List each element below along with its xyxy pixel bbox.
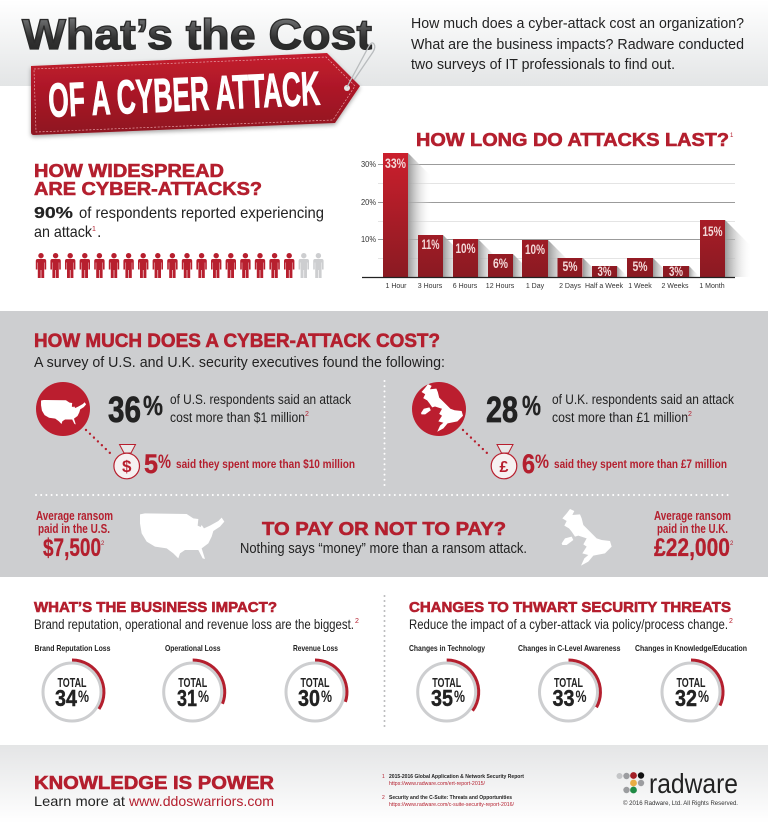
panel: cyber-attack cost [0, 311, 768, 577]
to pay or not to pay: TO PAY OR NOT TO PAY? [262, 519, 506, 539]
category labels: 1 Month [699, 283, 725, 290]
category labels: 1 Hour [385, 283, 407, 290]
stat: 28 percent UK: 2 [688, 411, 692, 418]
footnotes: Security and the C-Suite: Threats and Opportunities [389, 795, 512, 801]
map: USA white [140, 513, 224, 559]
icon: US map in red circle [36, 382, 90, 436]
intro text: How much does a cyber-attack cost an organization? [411, 15, 744, 32]
bars [383, 153, 725, 277]
bar values: 15% [702, 223, 723, 239]
ransom US [36, 509, 113, 562]
donut: changes in C-level awareness: 33 [552, 685, 574, 711]
heading: how widespread [34, 160, 262, 199]
subheading: business impact: Brand reputation, operational and revenue loss are the biggest. [34, 616, 354, 632]
heading: how much does a cyber-attack cost: HOW MUCH DOES A CYBER-ATTACK COST? [34, 331, 440, 352]
radware logo: radware [649, 768, 738, 799]
footnotes: https://www.radware.com/ert-report-2015/ [389, 781, 486, 787]
bar chart: attack duration: 20% [361, 197, 376, 207]
heading: how widespread: HOW WIDESPREAD [34, 160, 224, 181]
dotted connector US [86, 430, 111, 454]
donut: operational loss: Operational Loss [165, 643, 221, 653]
text: 90 percent of respondents [34, 205, 324, 241]
category labels [385, 283, 725, 290]
ransom UK: paid in the U.K. [657, 522, 728, 536]
donut: changes in technology: % [454, 687, 465, 706]
donut: revenue loss: Revenue Loss [293, 643, 338, 653]
icon: pound money bag: £ [500, 459, 509, 476]
donut: changes in knowledge/education: Changes in Knowledge/Education [635, 643, 747, 653]
learn more link: www.ddoswarriors.com [128, 793, 274, 809]
footnotes: 1 [382, 774, 385, 780]
to pay or not to pay [240, 519, 527, 557]
donut: revenue loss: TOTAL [300, 675, 330, 690]
donut: changes in knowledge/education: % [698, 687, 709, 706]
donut: brand reputation loss: TOTAL [58, 675, 87, 690]
ransom UK: 2 [730, 541, 734, 547]
stat: 36 percent US [108, 389, 351, 430]
donut: operational loss: % [198, 687, 209, 706]
category labels: 1 Day [526, 283, 545, 290]
donut: changes in C-level awareness: Changes in C-Level Awareness [518, 643, 621, 653]
donut: changes in C-level awareness: % [576, 687, 586, 706]
stat: 28 percent UK: cost more than £1 million [552, 410, 688, 425]
text: 90 percent of respondents: an attack [34, 224, 93, 241]
ransom US: Average ransom [36, 509, 113, 523]
donut: operational loss: 31 [177, 685, 197, 711]
bar values: 10% [456, 240, 476, 256]
learn more link [34, 793, 274, 809]
bar values: 6% [493, 255, 508, 271]
stat: 28 percent UK: 28 [486, 389, 518, 430]
icon: UK map in red circle [412, 382, 466, 436]
donut: revenue loss [286, 643, 347, 721]
category labels: 6 Hours [453, 283, 478, 290]
dotted connector UK [463, 430, 488, 454]
donut: changes in knowledge/education: 32 [675, 685, 697, 711]
donut: operational loss: TOTAL [178, 675, 207, 690]
bar values: 33% [385, 155, 406, 171]
ransom UK [654, 509, 734, 562]
heading: how widespread: ARE CYBER-ATTACKS? [34, 178, 262, 199]
donut: brand reputation loss: % [78, 687, 89, 706]
stat: 36 percent US: cost more than $1 million [170, 410, 305, 425]
bar values: 10% [525, 241, 545, 257]
donut: changes in technology [409, 643, 485, 721]
category labels: 12 Hours [486, 283, 515, 290]
radware logo: © 2016 Radware, Ltd. All Rights Reserved. [623, 799, 738, 807]
donut: changes in knowledge/education: TOTAL [676, 675, 706, 690]
stat: 6 percent UK: said they spent more than £7 million [554, 459, 727, 471]
stat: 36 percent US: 2 [305, 411, 309, 418]
subheading: business impact: 2 [355, 618, 359, 625]
bar values: 3% [669, 263, 683, 279]
header background [0, 0, 768, 86]
stat: 36 percent US: % [143, 390, 163, 421]
icon: paperclip [347, 43, 375, 87]
bar chart: attack duration [361, 153, 752, 290]
bar chart: attack duration: 10% [361, 234, 376, 244]
icon: dollar money bag [114, 444, 140, 479]
footnotes: 2015-2016 Global Application & Network Security Report [389, 774, 524, 780]
to pay or not to pay: Nothing says “money” more than a ransom attack. [240, 541, 527, 557]
knowledge is power: KNOWLEDGE IS POWER [34, 772, 274, 793]
footnotes [382, 774, 524, 808]
footnotes: https://www.radware.com/c-suite-security-report-2016/ [389, 802, 515, 808]
bar values [385, 155, 723, 279]
stat: 28 percent UK: % [522, 390, 541, 421]
category labels: Half a Week [585, 283, 623, 290]
price tag banner [31, 43, 375, 135]
stat: 6 percent UK [522, 449, 727, 479]
category labels: 3 Hours [418, 283, 443, 290]
bar values: 5% [632, 258, 648, 274]
intro text [411, 15, 744, 73]
category labels: 2 Days [559, 283, 581, 290]
text: 90 percent of respondents: 1 [92, 226, 96, 233]
text: 90 percent of respondents: of respondents reported experiencing [79, 205, 324, 222]
bar values: 3% [598, 263, 612, 279]
stat: 5 percent US: % [158, 452, 171, 473]
stat: 36 percent US: 36 [108, 389, 141, 430]
stat: 5 percent US: said they spent more than $10 million [176, 459, 355, 471]
donut: changes in technology: Changes in Technology [409, 643, 485, 653]
heading: changes to thwart: CHANGES TO THWART SECURITY THREATS [409, 600, 731, 616]
ransom US: 2 [101, 541, 105, 547]
stat: 6 percent UK: 6 [522, 449, 535, 479]
learn more link: Learn more at [34, 793, 125, 809]
subheading: changes to thwart: 2 [729, 618, 733, 625]
donut: changes in technology: 35 [431, 685, 453, 711]
intro text: What are the business impacts? Radware conducted [411, 36, 744, 53]
stat: 36 percent US: of U.S. respondents said an attack [170, 392, 351, 407]
category labels: 2 Weeks [661, 283, 689, 290]
text: 90 percent of respondents: . [97, 224, 101, 241]
price tag banner: OF A CYBER ATTACK [47, 63, 321, 128]
pictogram: 18 of 20 people [36, 253, 324, 278]
text: 90 percent of respondents: 90% [34, 205, 73, 222]
icon: dollar money bag: $ [122, 457, 132, 476]
donut: changes in C-level awareness: TOTAL [554, 675, 583, 690]
donut: changes in knowledge/education [635, 643, 747, 721]
radware logo [616, 768, 738, 807]
stat: 6 percent UK: % [535, 452, 549, 473]
stat: 28 percent UK: of U.K. respondents said an attack [552, 392, 734, 407]
footer panel [0, 745, 768, 823]
footnotes: 2 [382, 795, 385, 801]
stat: 5 percent US [144, 449, 355, 479]
donut: brand reputation loss: 34 [55, 685, 77, 711]
intro text: two surveys of IT professionals to find out. [411, 56, 675, 73]
donut: changes in technology: TOTAL [432, 675, 461, 690]
ransom US: paid in the U.S. [38, 522, 110, 536]
category labels: 1 Week [628, 283, 652, 290]
stat: 5 percent US: 5 [144, 449, 158, 479]
ransom UK: Average ransom [654, 509, 731, 523]
donut: revenue loss: % [321, 687, 332, 706]
bar shadows [408, 153, 752, 277]
heading: business impact: WHAT’S THE BUSINESS IMPACT? [34, 600, 277, 616]
bar values: 5% [562, 258, 578, 274]
heading: how long do attacks last: 1 [730, 133, 734, 139]
donut: operational loss [164, 643, 225, 721]
survey subheading: A survey of U.S. and U.K. security executives found the following: [34, 354, 445, 371]
heading: how long do attacks last: HOW LONG DO ATTACKS LAST? [416, 130, 729, 150]
stat: 28 percent UK [486, 389, 734, 430]
icon: pound money bag [491, 444, 517, 479]
donut: brand reputation loss [34, 643, 111, 721]
bar chart: attack duration: 30% [361, 159, 376, 169]
ransom US: $7,500 [43, 534, 101, 562]
title: What’s the Cost [22, 11, 372, 59]
bar values: 11% [422, 236, 440, 252]
donut: revenue loss: 30 [298, 685, 320, 711]
donut: changes in C-level awareness [518, 643, 621, 721]
donut: brand reputation loss: Brand Reputation Loss [34, 643, 111, 653]
map: UK white [562, 509, 612, 566]
ransom UK: £22,000 [654, 534, 730, 562]
